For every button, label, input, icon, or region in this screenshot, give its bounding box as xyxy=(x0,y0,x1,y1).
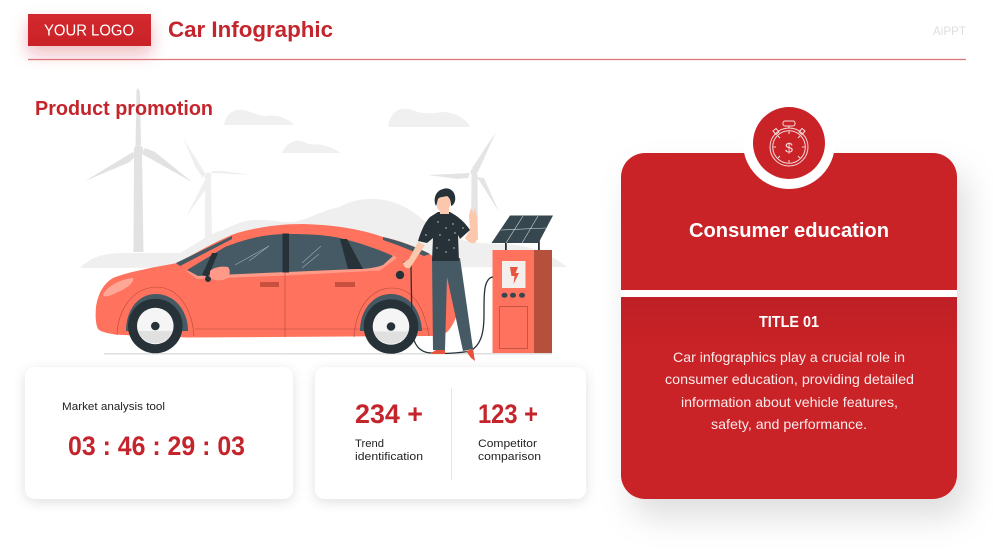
card heading: Consumer education xyxy=(689,220,889,242)
station door xyxy=(500,306,528,348)
indicator lights xyxy=(502,293,525,298)
section heading: Product promotion xyxy=(35,98,213,120)
solar panel xyxy=(492,216,553,251)
charging cable xyxy=(403,262,493,353)
panel lines xyxy=(117,272,430,337)
trousers xyxy=(432,258,473,351)
wind turbine 3 xyxy=(428,132,499,240)
brand mark: AiPPT xyxy=(933,24,967,38)
card subheading: TITLE 01 xyxy=(759,314,819,331)
man's left arm xyxy=(403,242,425,268)
statistic: trend identification: Trend xyxy=(355,438,384,450)
side windows xyxy=(187,234,393,276)
panel: statistics xyxy=(315,367,586,499)
rear wheel xyxy=(360,294,422,354)
head xyxy=(437,195,451,214)
windshield xyxy=(176,236,232,266)
window glints xyxy=(235,246,321,268)
statistic: competitor comparison: 123 + xyxy=(478,399,538,429)
header xyxy=(28,14,967,46)
statistic: competitor comparison xyxy=(478,399,541,463)
title: Car Infographic xyxy=(168,17,333,42)
car xyxy=(96,224,457,354)
card body text: safety, and performance. xyxy=(711,416,867,432)
wiper and mirror xyxy=(202,253,218,277)
card lower section xyxy=(621,297,957,499)
car body xyxy=(96,224,457,338)
rear windscreen xyxy=(383,237,430,256)
illustration: car charging scene xyxy=(80,88,567,361)
statistic: trend identification: identification xyxy=(355,451,423,463)
front wheel xyxy=(126,294,188,353)
charging station xyxy=(492,216,553,353)
card body text: information about vehicle features, xyxy=(681,394,898,410)
statistic: competitor comparison: Competitor xyxy=(478,438,537,450)
man's right arm xyxy=(465,208,478,243)
panel: market analysis countdown xyxy=(25,367,293,499)
shirt print xyxy=(425,221,464,253)
wind turbine 2 xyxy=(183,138,253,241)
logo box: YOUR LOGO xyxy=(44,22,134,40)
statistic: competitor comparison: comparison xyxy=(478,451,541,463)
window sill xyxy=(185,255,397,279)
station body xyxy=(492,250,534,353)
card shadow xyxy=(621,153,957,499)
shoes xyxy=(431,349,475,361)
statistic: trend identification: 234 + xyxy=(355,399,423,429)
card body text: Car infographics play a crucial role in xyxy=(673,349,905,365)
rear pillar xyxy=(340,239,363,269)
icon: stopwatch badge: $ xyxy=(785,140,793,156)
countdown value: 03 : 46 : 29 : 03 xyxy=(68,431,245,461)
headlight highlight xyxy=(103,278,133,296)
card body text xyxy=(665,349,914,432)
icon: stopwatch badge xyxy=(743,97,835,189)
man xyxy=(403,188,478,361)
statistic: trend identification xyxy=(355,399,423,463)
wind turbine 1 xyxy=(85,88,192,252)
door handles xyxy=(260,282,279,287)
ground line xyxy=(104,353,552,354)
logo box xyxy=(28,14,151,46)
station screen xyxy=(502,261,526,288)
background scenery xyxy=(80,88,567,268)
hair xyxy=(435,188,455,206)
card body text: consumer education, providing detailed xyxy=(665,371,914,387)
countdown label: Market analysis tool xyxy=(62,401,165,413)
panel: consumer education xyxy=(621,97,957,499)
shirt xyxy=(418,212,470,261)
door pillar xyxy=(282,234,289,272)
charging plug xyxy=(396,271,404,279)
card upper section xyxy=(621,153,957,290)
